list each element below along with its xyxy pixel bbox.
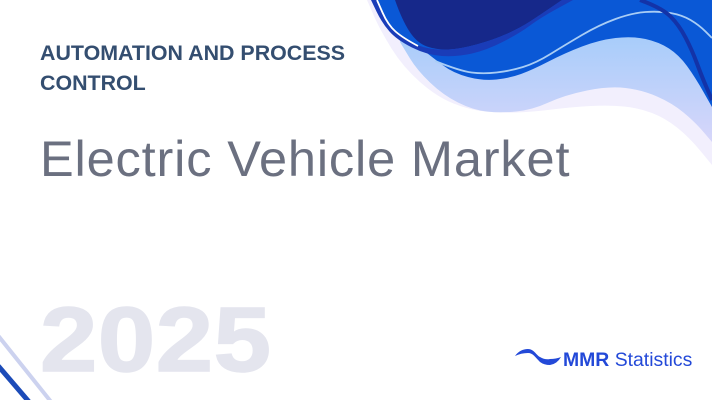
- logo text: MMR Statistics: [563, 349, 692, 371]
- decorative diagonal lines: bottom left: [0, 335, 52, 400]
- year watermark: 2025: [40, 289, 271, 391]
- icon: logo wave: [515, 349, 561, 365]
- logo: MMR Statistics: [515, 349, 692, 371]
- title: Electric Vehicle Market: [40, 130, 570, 186]
- heading: category: [40, 41, 345, 95]
- heading: category: AUTOMATION AND PROCESS: [40, 41, 345, 65]
- heading: category: CONTROL: [40, 71, 146, 95]
